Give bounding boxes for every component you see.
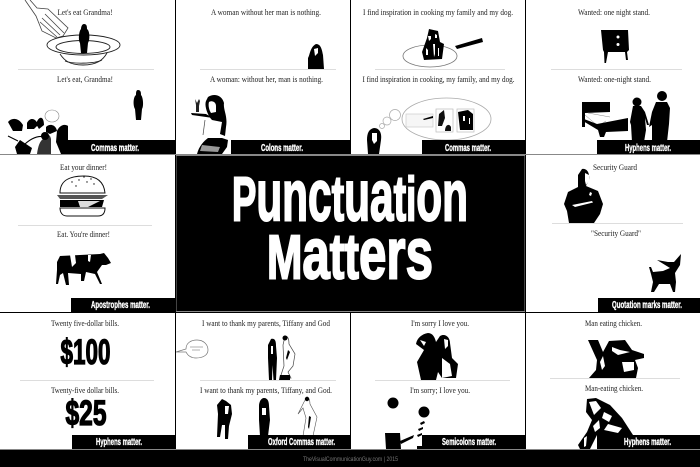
panel: Oxford comma	[176, 319, 350, 449]
icon: plate	[47, 35, 120, 65]
text: parents, Tiffany and God: I want to thank my parents, Tiffany and God	[202, 319, 330, 328]
text: Twenty five-dollar bills: Twenty five-dollar bills.	[51, 319, 119, 328]
icon: family at dinner table	[8, 110, 68, 154]
text: Man eating chicken: Man eating chicken.	[585, 319, 642, 328]
panel: Wanted one night stand	[578, 8, 700, 154]
text: Eat. You're dinner: Eat. You're dinner!	[57, 230, 110, 239]
icon: sad woman	[308, 44, 324, 69]
icon: chihuahua	[649, 254, 681, 292]
label: Hyphens matter: Hyphens matter.	[96, 437, 142, 448]
text: one-night stand: Wanted: one-night stand.	[578, 75, 651, 84]
icon: family in pan	[422, 29, 444, 60]
text: Twenty-five dollar bills: Twenty-five dollar bills.	[51, 386, 119, 395]
text: one night stand: Wanted: one night stand.	[578, 8, 650, 17]
label: Hyphens matter: Hyphens matter.	[624, 437, 671, 448]
text: parents, Tiffany, and God: I want to thank my parents, Tiffany, and God.	[200, 386, 332, 395]
icon: security guard	[564, 169, 603, 223]
panel: cooking my family and my dog	[362, 8, 526, 154]
text: quoted Security Guard: "Security Guard"	[591, 229, 641, 238]
icon: grandma standing	[134, 90, 143, 120]
text: Security Guard: Security Guard	[593, 163, 637, 172]
footer bar	[0, 450, 700, 467]
label: Commas matter	[422, 140, 526, 154]
text: Let's eat, Grandma: Let's eat, Grandma!	[57, 75, 113, 84]
label: Semicolons matter	[422, 435, 526, 449]
text: woman: without her, man: A woman: without her, man is nothing.	[210, 75, 323, 84]
icon: Tiffany	[259, 398, 270, 436]
label: Oxford Commas matter	[248, 435, 350, 449]
icon: man-eating chicken	[578, 398, 633, 449]
label: Apostrophes matter	[71, 298, 175, 312]
icon: speech bubble	[176, 340, 208, 358]
icon: cow	[56, 253, 111, 285]
panel: Security Guard	[564, 163, 700, 312]
icon: God	[298, 397, 317, 436]
panel: I'm sorry I love you	[385, 319, 526, 449]
icon: man biting chicken	[588, 340, 644, 378]
icon: grandma on plate	[79, 24, 89, 53]
icon: frying pan	[403, 38, 483, 67]
icon: man and woman talking	[385, 398, 430, 449]
icon: thinking woman	[367, 128, 381, 154]
icon: woman holding tiny man	[191, 95, 228, 154]
label: Commas matter: Commas matter.	[91, 143, 139, 154]
label: Commas matter	[68, 140, 175, 154]
icon: bed	[582, 102, 628, 137]
label: Quotation marks matter	[598, 298, 700, 312]
text: cooking my family: I find inspiration in cooking my family and my dog.	[363, 8, 513, 17]
icon: thought bubble	[380, 98, 491, 140]
number: $25: $25	[66, 394, 106, 433]
label: Semicolons matter: Semicolons matter.	[442, 437, 496, 448]
panel: Man eating chicken	[578, 319, 700, 449]
label: Oxford Commas matter: Oxford Commas matter.	[268, 437, 335, 448]
icon: arguing couple	[416, 333, 458, 380]
icon: burger	[57, 176, 108, 216]
panel: Let's eat Grandma	[8, 0, 175, 154]
label: Colons matter: Colons matter.	[261, 143, 303, 154]
label: Commas matter: Commas matter.	[445, 143, 491, 154]
icon: fork	[25, 0, 68, 38]
icon: Tiffany and God	[268, 336, 295, 380]
footer credit: TheVisualCommunicationGuy.com | 2015	[303, 456, 398, 463]
panel: title	[176, 156, 525, 312]
text: Eat your dinner: Eat your dinner!	[60, 163, 107, 172]
text: I'm sorry I love you: I'm sorry I love you.	[411, 319, 469, 328]
heading: Punctuation: Punctuation	[232, 156, 468, 236]
text: cooking, my family: I find inspiration in cooking, my family, and my dog.	[362, 75, 514, 84]
number: $100: $100	[60, 333, 110, 372]
text: I'm sorry; I love you: I'm sorry; I love you.	[410, 386, 470, 395]
panel: Eat your dinner	[56, 163, 175, 312]
label: Hyphens matter	[597, 140, 700, 154]
panel: A woman without her man	[191, 8, 350, 154]
label: Colons matter	[231, 140, 350, 154]
icon: parents	[217, 399, 232, 439]
heading: Matters: Matters	[267, 214, 433, 294]
icon: nightstand	[601, 30, 629, 63]
label: Apostrophes matter: Apostrophes matter.	[91, 300, 150, 311]
text: woman without her man: A woman without her man is nothing.	[211, 8, 321, 17]
icon: couple silhouette	[630, 91, 670, 142]
text: Man-eating chicken: Man-eating chicken.	[585, 384, 643, 393]
text: Let's eat Grandma: Let's eat Grandma!	[58, 8, 112, 17]
panel: twenty five-dollar bills	[51, 319, 175, 449]
